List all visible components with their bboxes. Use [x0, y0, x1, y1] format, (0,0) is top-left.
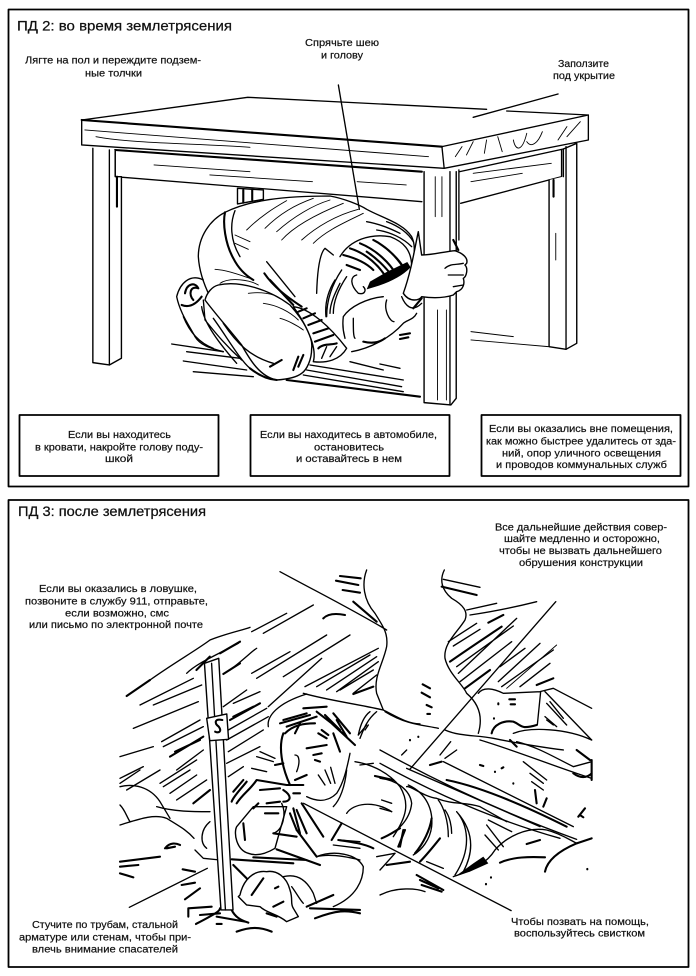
text: tap on pipes: Стучите по трубам, стальной: [32, 919, 178, 931]
callout: in bed: Если вы находитесь: [68, 430, 171, 441]
illustration: pipe: [196, 657, 233, 910]
text: act slowly: чтобы не вызвать дальнейшего: [499, 545, 662, 557]
text: if trapped: [25, 584, 208, 631]
text: crawl under cover: [553, 59, 615, 82]
text: use a whistle: воспользуйтесь свистком: [514, 928, 645, 940]
text: act slowly: Все дальнейшие действия совер-: [495, 522, 667, 534]
text: crawl under cover: под укрытие: [553, 71, 615, 82]
heading: panel 2: ПД 2: во время землетрясения: [17, 18, 232, 34]
heading: panel 3: ПД 3: после землетрясения: [18, 503, 206, 519]
callout: in car: остановитесь: [314, 442, 384, 454]
text: if trapped: позвоните в службу 911, отправьте,: [25, 596, 208, 608]
leader line: whistle: [304, 803, 511, 911]
text: crawl under cover: Заползите: [558, 59, 609, 70]
illustration: rubble lower right: [380, 740, 592, 895]
illustration: table: [82, 97, 588, 405]
illustration: crouching person lower body: [172, 278, 422, 397]
text: act slowly: [495, 522, 667, 569]
leader line: under cover: [473, 94, 558, 117]
callout: outdoors: Если вы оказались вне помещения,: [489, 424, 673, 435]
text: use a whistle: [511, 916, 649, 940]
illustration: collapsed roof left: [120, 570, 420, 783]
panel: during earthquake: [8, 10, 688, 486]
callout: outdoors: [482, 415, 680, 476]
callout: in bed: [20, 415, 218, 476]
callout: outdoors: ний, опор уличного освещения: [502, 448, 661, 460]
text: tap on pipes: влечь внимание спасателей: [32, 944, 178, 956]
leader line: slow actions: [410, 602, 556, 769]
callout: in car: Если вы находитесь в автомобиле,: [260, 429, 437, 441]
text: use a whistle: Чтобы позвать на помощь,: [511, 916, 649, 928]
text: hide neck and head: Спрячьте шею: [305, 38, 380, 49]
callout: in car: и оставайтесь в нем: [296, 454, 402, 465]
illustration: man with whistle: [252, 707, 432, 907]
text: tap on pipes: арматуре или стенам, чтобы при-: [19, 932, 191, 944]
illustration: collapsed roof right: [385, 570, 592, 750]
text: act slowly: шайте медленно и осторожно,: [504, 534, 660, 545]
text: if trapped: если возможно, смс: [65, 608, 169, 620]
leader line: neck and head: [338, 85, 359, 209]
illustration: rubble and hand lower left: [120, 770, 360, 932]
text: if trapped: Если вы оказались в ловушке,: [39, 584, 197, 595]
text: act slowly: обрушения конструкции: [519, 557, 643, 569]
text: if trapped: или письмо по электронной почте: [29, 620, 203, 631]
text: lie on floor: [25, 56, 201, 80]
illustration: crouching person upper body: [198, 196, 467, 380]
callout: in bed: в кровати, накройте голову поду-: [35, 442, 203, 454]
callout: in car: [250, 415, 450, 476]
callout: outdoors: как можно быстрее удалитесь от зда-: [486, 436, 676, 448]
text: lie on floor: ные толчки: [85, 68, 142, 80]
callout: outdoors: и проводов коммунальных служб: [496, 459, 667, 471]
text: hide neck and head: [305, 38, 380, 62]
text: hide neck and head: и голову: [321, 50, 363, 62]
text: lie on floor: Лягте на пол и переждите подзем-: [25, 56, 201, 66]
text: tap on pipes: [19, 919, 191, 956]
callout: in bed: шкой: [105, 454, 133, 465]
panel: after earthquake: [8, 500, 688, 967]
